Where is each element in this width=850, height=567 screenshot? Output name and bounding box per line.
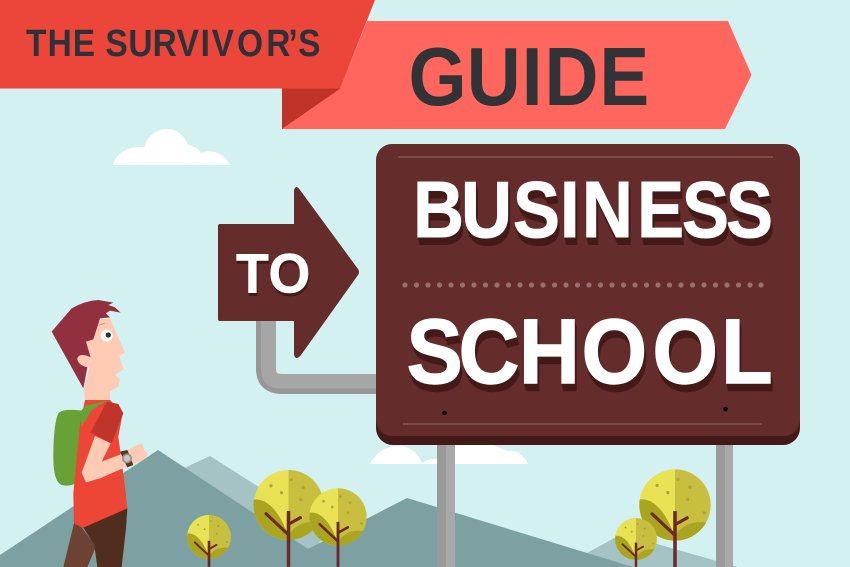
ribbon fold <box>282 88 341 129</box>
main sign board <box>376 144 800 445</box>
backpack strap <box>80 401 109 427</box>
front leg <box>83 508 127 567</box>
hiker character <box>52 300 148 567</box>
head and neck <box>84 318 125 400</box>
eye <box>101 330 113 342</box>
sign posts <box>437 440 733 567</box>
bottom rule <box>403 423 762 425</box>
arm <box>82 436 148 482</box>
tree: large right <box>639 469 711 567</box>
text: guide: GUIDE <box>409 30 649 123</box>
top rule <box>398 156 773 158</box>
text: the survivor's: THE SURVIVOR’S <box>26 22 320 64</box>
eyebrow <box>99 323 105 325</box>
tree: small right <box>615 518 657 567</box>
salmon guide ribbon <box>282 21 752 129</box>
ear <box>77 355 91 367</box>
sleeve <box>91 402 123 443</box>
wristwatch <box>120 450 133 467</box>
shirt <box>73 400 127 528</box>
tree: large centre <box>253 470 324 567</box>
background mountain: light left <box>180 456 330 552</box>
arrow sign: to <box>218 187 359 358</box>
board face <box>376 144 800 436</box>
board shadow <box>376 150 800 445</box>
back leg <box>63 523 96 567</box>
foreground mountains <box>0 450 633 567</box>
text: to: TO <box>236 241 310 305</box>
cloud: behind sign <box>370 444 528 464</box>
arrow support pipe <box>258 315 380 391</box>
backpack <box>53 410 83 486</box>
text: school: SCHOOL <box>407 300 773 403</box>
tree: medium centre <box>309 488 367 567</box>
banner: the survivor's guide <box>0 0 752 129</box>
cloud: upper left <box>113 129 230 165</box>
red survivor ribbon <box>0 0 375 88</box>
dotted divider <box>402 282 764 288</box>
tree: far left <box>187 515 231 567</box>
text: business: BUSINESS <box>413 165 773 254</box>
screw holes <box>442 407 728 415</box>
hair <box>52 300 121 388</box>
background mountain: light right <box>585 534 738 567</box>
